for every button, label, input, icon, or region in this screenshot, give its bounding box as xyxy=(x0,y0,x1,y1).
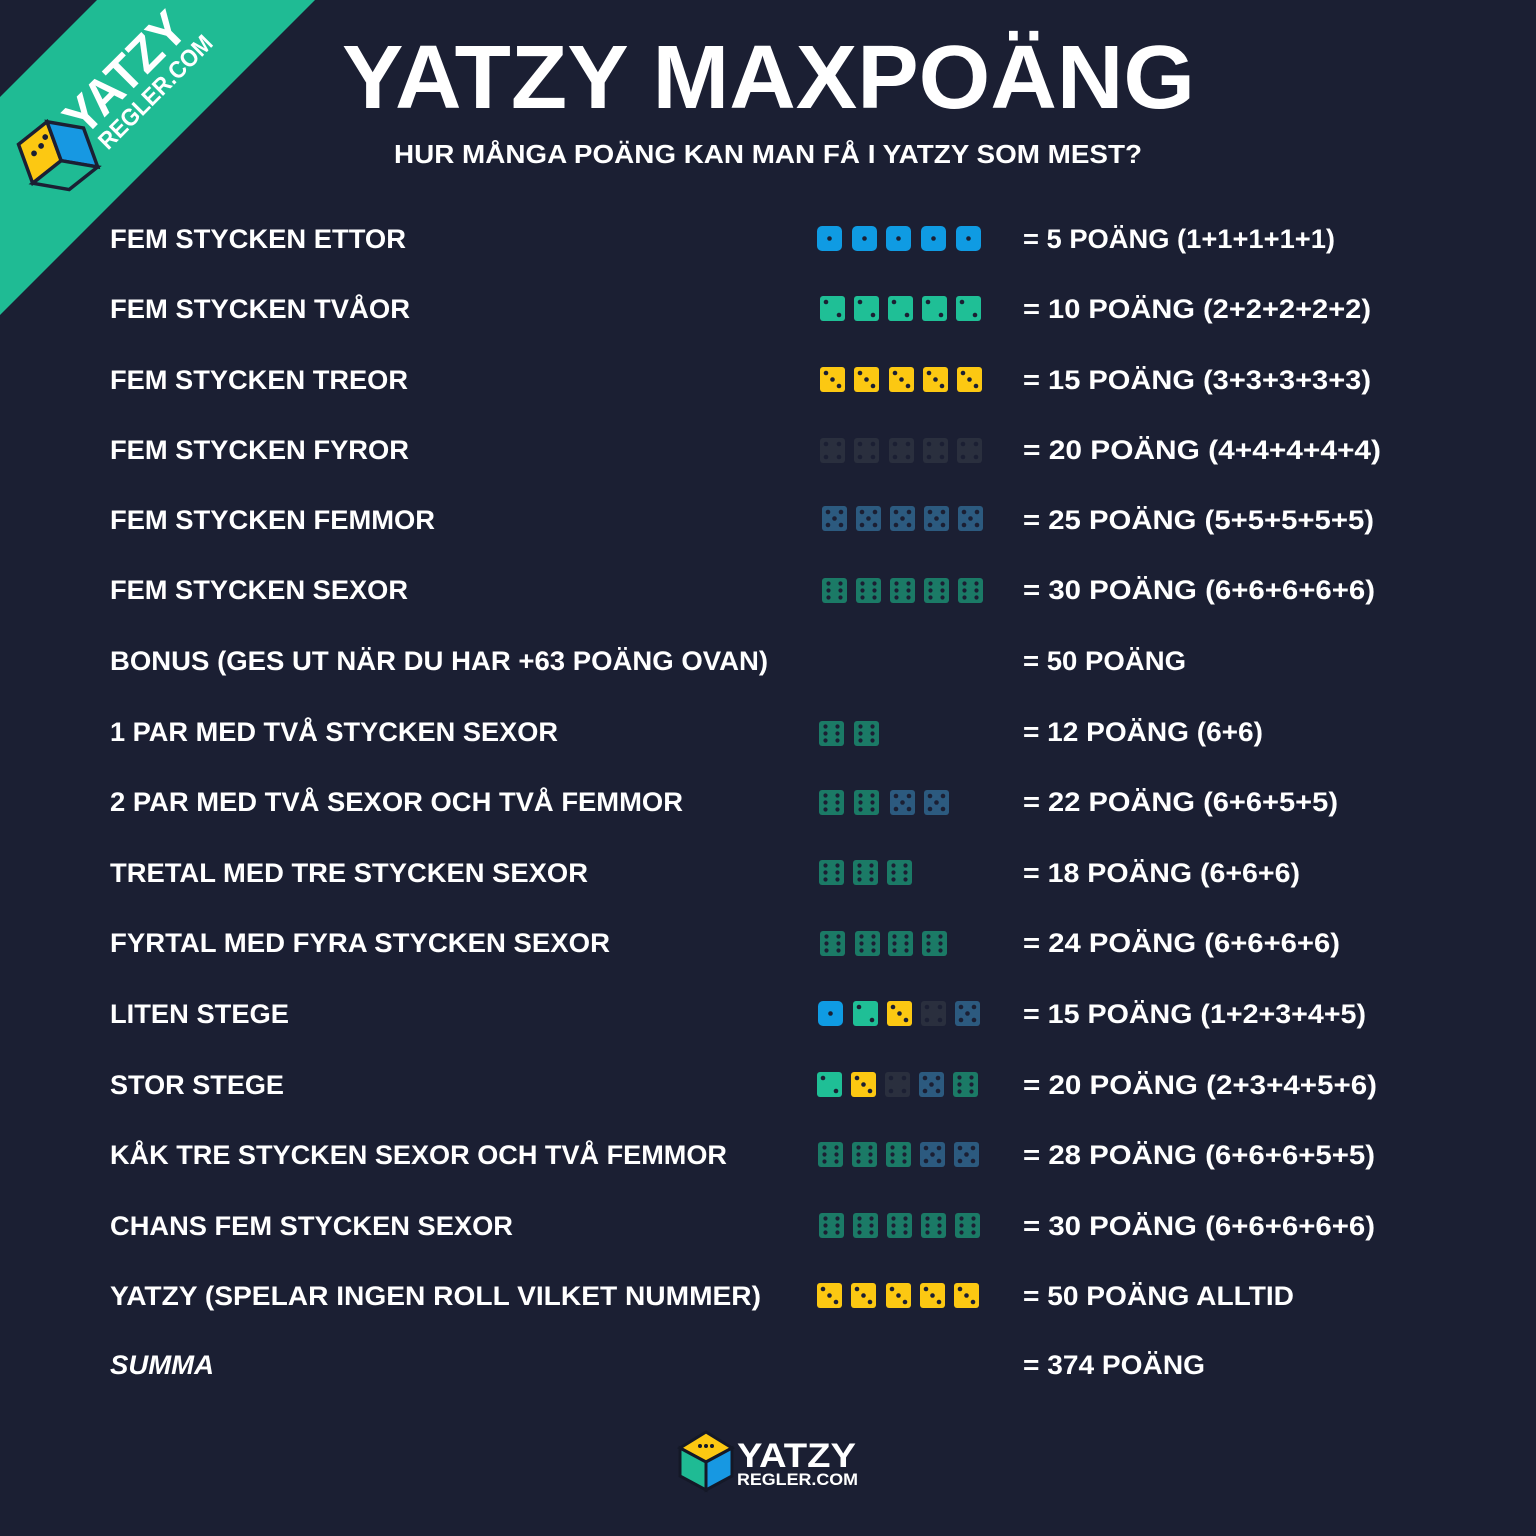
footer logo: REGLER.COM xyxy=(737,1470,858,1489)
rows: points: = 20 POÄNG (4+4+4+4+4) xyxy=(1023,435,1381,465)
corner banner xyxy=(0,0,315,315)
rows: points: = 30 POÄNG (6+6+6+6+6) xyxy=(1023,575,1375,605)
rows: points: = 5 POÄNG (1+1+1+1+1) xyxy=(1023,224,1335,254)
rows: points: = 25 POÄNG (5+5+5+5+5) xyxy=(1023,505,1374,535)
rows: labels: BONUS (GES UT NÄR DU HAR +63 POÄNG OVAN) xyxy=(110,646,768,676)
dice column xyxy=(817,226,983,1308)
rows: labels: FEM STYCKEN FEMMOR xyxy=(110,505,435,535)
rows: points: = 50 POÄNG ALLTID xyxy=(1023,1281,1294,1311)
rows: labels: CHANS FEM STYCKEN SEXOR xyxy=(110,1211,513,1241)
rows: points: = 24 POÄNG (6+6+6+6) xyxy=(1023,928,1340,958)
rows: points: = 18 POÄNG (6+6+6) xyxy=(1023,858,1300,888)
rows: labels: STOR STEGE xyxy=(110,1070,284,1100)
rows: labels: FEM STYCKEN FYROR xyxy=(110,435,409,465)
rows: labels: SUMMA xyxy=(110,1350,214,1380)
rows: points: = 12 POÄNG (6+6) xyxy=(1023,717,1263,747)
rows: labels: 2 PAR MED TVÅ SEXOR OCH TVÅ FEMMOR xyxy=(110,786,683,817)
rows: labels: FEM STYCKEN ETTOR xyxy=(110,224,406,254)
corner logo text: REGLER.COM xyxy=(93,30,218,155)
rows: points: = 28 POÄNG (6+6+6+5+5) xyxy=(1023,1140,1375,1170)
rows: labels: LITEN STEGE xyxy=(110,999,289,1029)
rows: points: = 22 POÄNG (6+6+5+5) xyxy=(1023,787,1338,817)
corner logo text: YATZY xyxy=(52,0,198,146)
rows: labels: 1 PAR MED TVÅ STYCKEN SEXOR xyxy=(110,716,558,747)
rows: labels: YATZY (SPELAR INGEN ROLL VILKET NUMMER) xyxy=(110,1281,761,1311)
icon: footer box xyxy=(680,1432,732,1490)
rows: points: = 15 POÄNG (1+2+3+4+5) xyxy=(1023,999,1366,1029)
title: YATZY MAXPOÄNG xyxy=(342,28,1195,128)
footer logo xyxy=(680,1432,858,1490)
subtitle: HUR MÅNGA POÄNG KAN MAN FÅ I YATZY SOM MEST? xyxy=(394,139,1142,169)
rows: labels: FYRTAL MED FYRA STYCKEN SEXOR xyxy=(110,928,610,958)
footer logo text: YATZY xyxy=(737,1437,856,1475)
rows: labels: FEM STYCKEN SEXOR xyxy=(110,575,408,605)
rows: points: = 374 POÄNG xyxy=(1023,1350,1205,1380)
rows: points: = 15 POÄNG (3+3+3+3+3) xyxy=(1023,365,1371,395)
rows: labels: TRETAL MED TRE STYCKEN SEXOR xyxy=(110,858,588,888)
rows: points xyxy=(1023,224,1381,1380)
rows: points: = 50 POÄNG xyxy=(1023,646,1186,676)
rows: points: = 20 POÄNG (2+3+4+5+6) xyxy=(1023,1070,1377,1100)
icon: corner dice logo xyxy=(15,111,102,201)
rows: labels xyxy=(110,224,768,1380)
rows: points: = 30 POÄNG (6+6+6+6+6) xyxy=(1023,1211,1375,1241)
rows: labels: FEM STYCKEN TVÅOR xyxy=(110,293,410,324)
rows: labels: FEM STYCKEN TREOR xyxy=(110,365,408,395)
rows: points: = 10 POÄNG (2+2+2+2+2) xyxy=(1023,294,1371,324)
rows: labels: KÅK TRE STYCKEN SEXOR OCH TVÅ FEMMOR xyxy=(110,1139,727,1170)
